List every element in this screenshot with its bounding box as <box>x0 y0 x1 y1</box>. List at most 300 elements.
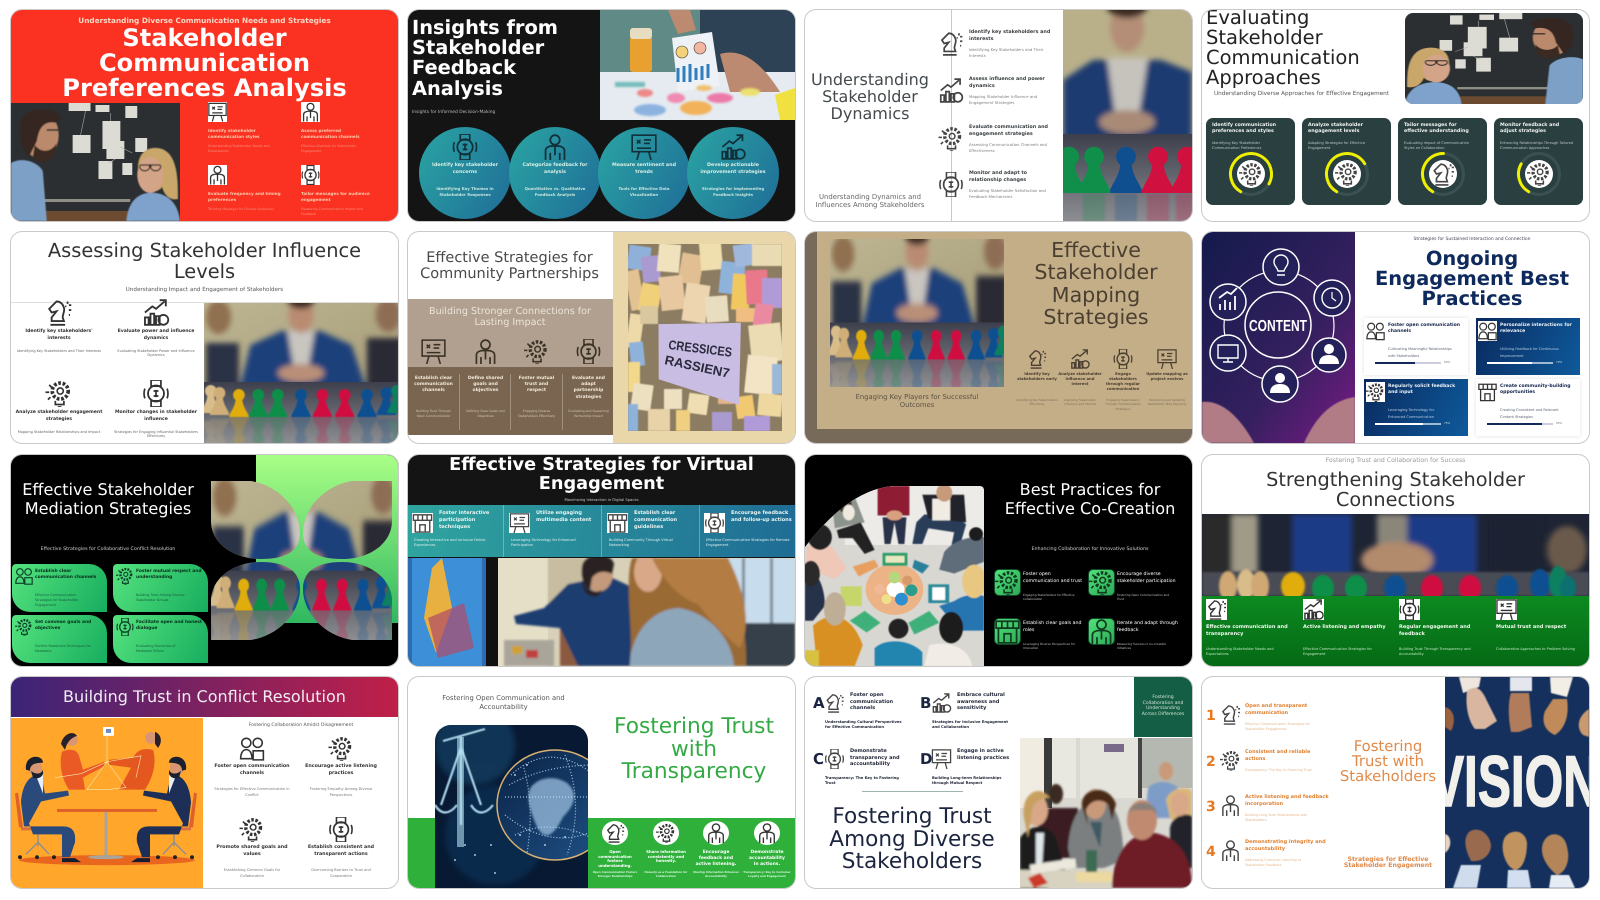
item description: Addressing Concerns: Listening to Stakeholder Feedback <box>1245 858 1301 867</box>
item description: Feedback <box>301 212 316 216</box>
item description: Understanding Stakeholder Needs and Expectations <box>1206 646 1274 656</box>
item: clear channels <box>12 564 107 612</box>
icon: watch <box>1112 349 1134 369</box>
item description: Measuring Success in Co-Creation Initiatives <box>1117 642 1166 650</box>
icon: chess knight <box>605 823 625 843</box>
title: Strengthening Stakeholder <box>1266 468 1525 491</box>
item heading: communication styles <box>208 134 260 138</box>
item heading: Foster open communication and trust <box>1023 572 1082 584</box>
photo: content cycle diagram <box>1202 232 1355 443</box>
item: dialogue <box>113 615 208 663</box>
subtitle: Insights for Informed Decision-Making <box>412 110 495 115</box>
icon: bulb <box>1089 570 1114 595</box>
item: goals <box>995 619 1087 659</box>
item heading: Demonstrate transparency and accountability <box>850 748 900 767</box>
item: monitor <box>939 170 1046 199</box>
icon: gear head <box>116 567 134 585</box>
item heading: Evaluate frequency and timing <box>208 190 281 196</box>
icon: watch <box>939 172 963 197</box>
icon: briefcase <box>208 102 227 122</box>
title: Fostering Trust <box>832 804 992 829</box>
box: solicit feedback <box>1364 379 1468 436</box>
item description: Identifying Key Stakeholders and Their Interests <box>17 348 101 352</box>
panel: trust in conflict resolution <box>11 677 398 888</box>
icon: person with coin <box>544 134 566 160</box>
title: Assessing Stakeholder Influence <box>48 239 361 262</box>
title: Stakeholder <box>412 36 544 59</box>
card: preferences <box>1206 118 1295 205</box>
title: Among Diverse <box>829 826 995 852</box>
item description: Creating Interactive and Inclusive Online Experiences <box>414 538 485 547</box>
item: empathy <box>1299 596 1396 666</box>
title: Community Partnerships <box>420 266 599 282</box>
item: 3 <box>1206 795 1326 831</box>
item heading: Tailor messages for effective understanding <box>1404 123 1469 134</box>
icon: watch <box>1399 599 1420 620</box>
item description: Transparency: The Key to Fostering Trust <box>825 776 899 785</box>
item heading: Foster open communication channels <box>214 764 290 776</box>
subtitle: Influences Among Stakeholders <box>816 201 924 209</box>
item description: Leveraging Technology for Enhanced Participation <box>511 538 576 547</box>
title: Trust with <box>1352 752 1424 770</box>
item description: Quantitative vs. Qualitative Feedback Analysis <box>525 186 585 197</box>
item heading: Develop actionable improvement strategies <box>700 163 766 175</box>
item description: Honesty as a Foundation for Collaboration <box>645 870 687 878</box>
box: community building <box>1476 379 1580 436</box>
card: engagement levels <box>1302 118 1391 205</box>
item description: Cultivating Meaningful Relationships with Stakeholders <box>1388 347 1452 358</box>
item: communication styles <box>208 102 270 153</box>
panel: trust among diverse stakeholders <box>805 677 1192 888</box>
icon: gear head <box>1366 382 1385 402</box>
numeral 1: 1 <box>1206 708 1216 724</box>
item description: Effective Communication Strategies for Engagement <box>1303 646 1372 656</box>
icon: chess knight <box>940 32 962 56</box>
icon: framed person <box>631 134 657 160</box>
panel: trust with transparency <box>408 677 795 888</box>
item description <box>301 207 363 216</box>
title <box>408 250 611 282</box>
panel: feedback analysis <box>408 10 795 221</box>
item description: Mapping Stakeholder Influence and Engagement Strategies <box>969 94 1037 105</box>
item: engagement <box>14 381 104 441</box>
item: identify early <box>1016 350 1058 425</box>
item description: Identifying Key Stakeholders Effectively <box>1016 398 1058 406</box>
item heading: Measure sentiment and trends <box>612 163 676 175</box>
icon: presentation <box>421 339 446 364</box>
title: Fostering Trust <box>614 714 774 739</box>
photo: man behind game pawns <box>1063 10 1192 221</box>
item heading: Establish clear communication channels <box>414 376 453 393</box>
item description: Conflict Resolution Techniques for Mediators <box>35 644 91 653</box>
item heading: Open and transparent communication <box>1245 703 1307 716</box>
icon: light bulb <box>524 339 549 364</box>
panel: trust with stakeholders <box>1202 677 1589 888</box>
item description: Enhancing Relationships Through Tailored Communication Approaches <box>1500 141 1573 150</box>
item heading: Embrace cultural awareness and sensitivity <box>957 692 1005 711</box>
subtitle <box>425 694 582 711</box>
icon: gear <box>1335 163 1357 186</box>
item description: Engagement <box>301 149 321 153</box>
photo: petal-cropped meeting <box>211 481 392 640</box>
icon: gear head <box>656 823 676 843</box>
item heading: dynamics <box>144 336 168 341</box>
icon: chess knight <box>1206 599 1227 620</box>
title: with <box>671 736 717 762</box>
item description: Tools for Effective Data Visualization <box>619 186 669 197</box>
percent label: 75% <box>1444 421 1450 425</box>
caption: Engaging Key Players for Successful <box>856 393 978 401</box>
title: Best Practices for <box>1020 480 1160 498</box>
item heading: Create community-building opportunities <box>1500 384 1571 395</box>
icon: house <box>995 619 1020 644</box>
icon: chip <box>607 513 628 533</box>
photo: fists around VISION <box>1445 677 1589 888</box>
title: Fostering <box>1354 738 1422 754</box>
item heading <box>106 329 206 342</box>
item heading: Active listening and feedback incorporation <box>1245 794 1329 807</box>
item heading: Foster open communication channels <box>850 692 893 711</box>
progress bar <box>1487 423 1553 425</box>
photo: overhead circle workshop <box>805 486 984 666</box>
title <box>1202 470 1589 510</box>
title <box>990 480 1190 518</box>
item: active listening <box>298 737 384 803</box>
item: influence <box>940 76 1045 105</box>
item heading: Evaluate power and influence <box>118 329 194 334</box>
panel: engagement best practices <box>1202 232 1589 443</box>
item heading: Set common goals and objectives <box>35 620 91 631</box>
title: Approaches <box>1206 66 1321 89</box>
photo: meeting behind pawns <box>204 303 398 443</box>
subtitle: Understanding Dynamics and <box>819 193 921 201</box>
title <box>805 806 1019 874</box>
percent label: 85% <box>1556 421 1562 425</box>
progress bar <box>1375 423 1441 425</box>
icon circle <box>602 821 628 845</box>
item: 2 <box>1206 750 1326 786</box>
item: shared goals <box>209 818 295 884</box>
item: iterate <box>1089 619 1181 659</box>
icon: watch <box>116 618 134 636</box>
subtitle: Fostering Trust and Collaboration for Success <box>1326 457 1465 464</box>
item: key stakeholders <box>940 29 1050 58</box>
icon: speaker <box>704 513 725 533</box>
item heading: Assess influence and power dynamics <box>969 76 1045 89</box>
icon: arrow with coins <box>722 134 746 160</box>
icon: chess knight <box>1220 704 1241 725</box>
item heading: Categorize feedback for analysis <box>523 163 587 175</box>
icon: growth chart <box>940 78 964 103</box>
title: Communication <box>1206 46 1360 69</box>
item description: Transparency: The Key to Fostering Trust <box>1245 768 1312 772</box>
subtitle: Enhancing Collaboration for Innovative Solutions <box>1031 547 1149 552</box>
item heading <box>208 190 281 202</box>
item description: Identifying Key Stakeholder Communication Preferences <box>1212 141 1261 150</box>
icon: chess knight <box>1026 349 1048 369</box>
item heading: interests <box>47 336 71 341</box>
icon: brain target <box>239 817 265 842</box>
title: Effective Stakeholder <box>22 480 194 498</box>
item heading: Effective communication and transparency <box>1206 624 1288 637</box>
progress bar <box>1487 362 1553 364</box>
item description: Engaging Diverse Stakeholders Effectively <box>518 409 555 418</box>
item: interests <box>14 300 104 360</box>
item: clear channels <box>408 340 459 435</box>
item description: Effective Communication Strategies for Stakeholder Engagement <box>1245 722 1310 731</box>
icon: plant tree <box>995 570 1020 595</box>
item description: Understanding Cultural Perspectives for Effective Communication <box>825 720 902 729</box>
photo: meeting behind pawns <box>830 239 1004 387</box>
item: monitor <box>111 381 201 441</box>
item heading: Identify key stakeholders' <box>25 329 93 334</box>
subtitle: Strategies for Sustained Interaction and Connection <box>1414 237 1530 242</box>
photo: two colleagues at chalkboard <box>1405 13 1583 104</box>
item: mutual trust <box>511 340 562 435</box>
item: update mapping <box>1146 350 1188 425</box>
panel: communication preferences <box>11 10 398 221</box>
item description: Identifying Key Themes in Stakeholder Responses <box>436 186 494 197</box>
subtitle: Accountability <box>479 703 528 711</box>
panel: communication approaches <box>1202 10 1589 221</box>
icon: growth chart <box>142 299 170 326</box>
item heading: strategies <box>46 417 72 422</box>
letter D: D <box>920 750 932 768</box>
item description: Sharing Information Enhances Accountability <box>693 870 739 878</box>
progress ring <box>1420 152 1465 196</box>
item: analyze influence <box>1059 350 1101 425</box>
photo: blurred meeting banner <box>1202 514 1589 596</box>
icon: chess knight <box>824 693 845 713</box>
item description: Building Long-term Relationships through Mutual Respect <box>932 776 1002 785</box>
item heading: Personalize interactions for relevance <box>1500 323 1572 334</box>
item heading <box>301 128 360 138</box>
photo: wall of sticky notes: RASSIEN7 <box>663 352 731 381</box>
item description: Identifying Key Stakeholders and Their Interests <box>969 47 1043 58</box>
item heading: Identify key stakeholder concerns <box>432 163 498 175</box>
item heading: Regularly solicit feedback and input <box>1388 384 1455 395</box>
item: regular engagement <box>1395 596 1492 666</box>
item: communication channels <box>301 102 360 153</box>
callout: Understanding <box>1146 706 1180 711</box>
item heading: Iterate and adapt through feedback <box>1117 621 1178 633</box>
item heading <box>208 128 260 139</box>
subtitle: Understanding Diverse Approaches for Effective Engagement <box>1214 91 1389 97</box>
item heading: Encourage diverse stakeholder participation <box>1117 572 1176 584</box>
title: Stakeholder <box>122 24 287 52</box>
icon: watch <box>142 380 170 407</box>
title <box>811 70 929 123</box>
item heading: Foster mutual trust and respect <box>519 376 554 393</box>
item heading: Monitor changes in stakeholder <box>115 410 197 415</box>
header title <box>11 677 398 717</box>
item: frequency <box>208 165 281 211</box>
item description: Fostering Empathy Among Diverse Perspectives <box>310 787 372 797</box>
title <box>408 456 795 493</box>
item description: Building Trust Among Diverse Stakeholder Groups <box>136 593 185 602</box>
item: mutual respect <box>113 564 208 612</box>
item heading: Facilitate open and honest dialogue <box>136 620 202 631</box>
item: information <box>641 820 691 888</box>
icon: gear <box>1239 163 1261 186</box>
icon: presentation board <box>1496 599 1517 620</box>
item heading: Tailor messages for audience <box>301 190 370 196</box>
item heading: Establish clear goals and roles <box>1023 621 1081 633</box>
item heading: engagement <box>301 196 331 202</box>
box: personalize <box>1476 318 1580 375</box>
icon circle <box>653 821 679 845</box>
title: Levels <box>174 260 235 282</box>
item description: Analyzing Stakeholder Influence and Interest <box>1064 398 1096 406</box>
item: 4 <box>1206 840 1326 876</box>
progress ring <box>1228 152 1274 196</box>
item heading: Regular engagement and feedback <box>1399 624 1470 637</box>
subtitle: Fostering Collaboration Amidst Disagreement <box>249 723 353 728</box>
title: Engagement <box>539 474 664 494</box>
item: transparency <box>1202 596 1299 666</box>
title: Feedback <box>412 56 516 79</box>
title: Stakeholder <box>1206 26 1323 49</box>
letter C: C <box>813 750 824 768</box>
item: key concerns <box>419 127 511 219</box>
diagram label: CONTENT <box>1249 318 1307 335</box>
icon: person <box>1220 795 1241 816</box>
photo: scales and globe <box>435 725 588 888</box>
item description: Engaging Stakeholders for Effective Collaboration <box>1023 593 1075 601</box>
icon: watch <box>824 749 845 769</box>
item heading: Analyze stakeholder influence and interest <box>1058 371 1102 386</box>
title: Effective Strategies for Virtual <box>449 455 754 475</box>
title: Stakeholders <box>842 849 982 874</box>
item heading: Foster interactive participation techniques <box>439 510 489 530</box>
icon: gear bulb <box>1220 750 1241 771</box>
box: open channels <box>1364 318 1468 375</box>
item heading: Foster mutual respect and understanding <box>136 569 201 580</box>
icon: robot <box>328 817 354 842</box>
title <box>11 241 398 282</box>
title: Ongoing <box>1426 247 1518 270</box>
panel: virtual engagement <box>408 455 795 666</box>
title <box>412 16 558 100</box>
item description <box>108 348 204 358</box>
item: improvement <box>687 127 779 219</box>
title: Understanding <box>811 70 929 89</box>
icon: storefront <box>1478 382 1497 402</box>
icon: table <box>412 513 433 533</box>
caption <box>830 393 1004 409</box>
item heading: Establish clear communication guidelines <box>634 510 677 530</box>
icon: target network <box>576 339 601 364</box>
progress ring <box>1516 152 1561 196</box>
icon: network <box>301 102 320 122</box>
item description: Fostering Open Communication and Trust <box>1117 593 1169 601</box>
title: Effective Strategies for <box>426 250 593 266</box>
item heading: Demonstrate accountability in actions. <box>749 850 785 867</box>
panel: mapping strategies <box>805 232 1192 443</box>
title: Mediation Strategies <box>25 498 191 518</box>
item description: Mapping Stakeholder Relationships and Impact <box>18 430 100 434</box>
title <box>1328 738 1448 784</box>
item heading: Monitor feedback and adjust strategies <box>1500 123 1559 134</box>
icon: gear bulb <box>328 736 354 761</box>
photo: people at interactive display <box>408 558 795 666</box>
panel: co-creation <box>805 455 1192 666</box>
callout <box>1134 677 1192 737</box>
item: C <box>813 749 918 794</box>
title: Analysis <box>412 77 503 100</box>
illustration: negotiation at table <box>11 718 203 888</box>
item heading: Engage stakeholders through regular communication <box>1106 371 1140 391</box>
icon: gear bulb <box>1527 163 1549 186</box>
item heading: Encourage active listening practices <box>305 764 377 776</box>
item: feedback <box>691 820 741 888</box>
icon: house with coin <box>452 134 478 160</box>
panel: stakeholder connections <box>1202 455 1589 666</box>
icon: presentation board <box>931 749 952 769</box>
item heading: Demonstrating integrity and accountability <box>1245 839 1326 852</box>
title: Effective <box>1051 238 1141 262</box>
item description: Overcoming Barriers to Trust and Cooperation <box>311 868 371 878</box>
item description: Collaborative Approaches to Problem Solving <box>1496 646 1575 650</box>
item description: Building Trust Through Open Communication <box>416 409 451 418</box>
title: Engagement Best <box>1375 267 1569 290</box>
item heading: Analyze stakeholder engagement <box>16 410 102 415</box>
item description: Monitoring and Updating Stakeholder Map Regularly <box>1148 398 1186 406</box>
item heading: Monitor and adapt to relationship changes <box>969 170 1027 183</box>
icon: chess knight <box>45 299 73 326</box>
item heading: Identify key stakeholders early <box>1017 371 1057 381</box>
numeral 4: 4 <box>1206 844 1216 860</box>
item heading <box>9 410 109 423</box>
item description: Effective Channels for Stakeholder <box>301 144 356 148</box>
panel: mediation strategies <box>11 455 398 666</box>
item heading: Assess preferred <box>301 128 341 132</box>
item: mutual trust <box>1492 596 1589 666</box>
item: accountability <box>742 820 794 888</box>
item heading: Evaluate communication and engagement strategies <box>969 124 1048 137</box>
item: power dynamics <box>111 300 201 360</box>
item description: Effectively <box>147 434 165 438</box>
item description: Building Trust Through Transparency and Accountability <box>1399 646 1471 656</box>
title <box>1206 10 1360 89</box>
item: multimedia <box>505 505 602 557</box>
icon: speaker at podium <box>757 823 777 843</box>
subtitle: Strategies for Effective <box>1348 856 1428 862</box>
note text: CRESSICES <box>667 337 733 360</box>
icon: growth chart <box>1069 349 1091 369</box>
item: evaluate <box>938 124 1048 153</box>
item description: Engaging Stakeholders Through Communication Strategies <box>1105 398 1141 411</box>
item: feedback <box>700 505 797 557</box>
item description <box>108 430 204 439</box>
item heading: Establish consistent and transparent actions <box>308 845 374 856</box>
item description: Effective Communication Strategies for Stakeholder Engagement <box>35 593 78 607</box>
icon: speaker at podium <box>1220 840 1241 861</box>
item description: Defining Clear Goals and Objectives <box>466 409 505 418</box>
item: regular communication <box>1102 350 1144 425</box>
title: Mapping <box>1052 282 1140 306</box>
item: 1 <box>1206 704 1326 740</box>
progress ring <box>1324 152 1369 196</box>
item heading <box>301 190 370 202</box>
item heading: Define shared goals and objectives <box>468 376 503 393</box>
item description <box>208 144 270 153</box>
item description: Effective Communication Strategies for Remote Engagement <box>706 538 790 547</box>
item description: Dynamics <box>147 353 165 357</box>
icon: people <box>1478 321 1497 341</box>
subtitle: Stakeholder Engagement <box>1344 862 1432 869</box>
item heading: Identify communication preferences and styles <box>1212 123 1276 134</box>
